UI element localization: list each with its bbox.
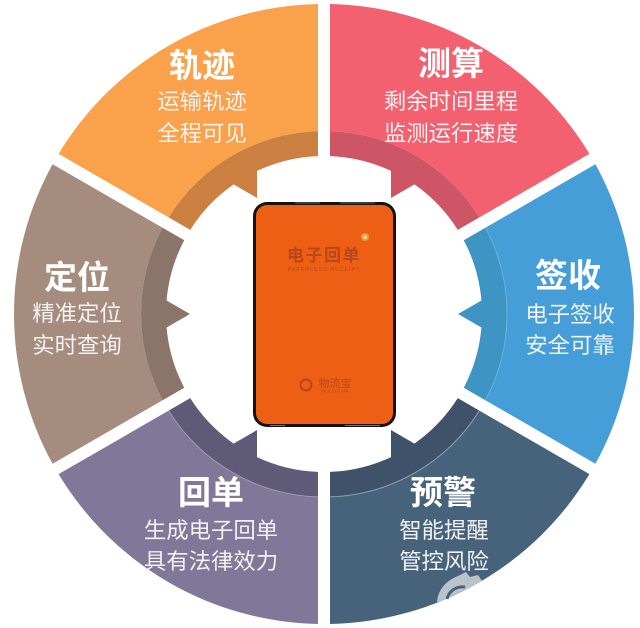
- text: 轨迹 description: 全程可见: [157, 121, 247, 146]
- icon: watermark swirl: [437, 572, 482, 604]
- panel: 定位: [14, 164, 190, 464]
- heading: 轨迹: 轨迹: [169, 47, 235, 84]
- heading: 预警: 预警: [410, 474, 476, 511]
- panel: 预警: [330, 398, 589, 624]
- text: 测算 description: 监测运行速度: [384, 121, 518, 146]
- arrow ring: 定位: [141, 228, 190, 400]
- arrow ring: 回单: [169, 398, 318, 497]
- device subtitle: PAPERLESS RECEIPT: [288, 267, 360, 273]
- panel: 签收: [458, 164, 634, 464]
- arrow ring: 预警: [330, 398, 479, 497]
- arrow ring: 签收: [458, 228, 507, 400]
- device title: 电子回单: [287, 246, 361, 265]
- device: orange receipt terminal: [253, 202, 396, 427]
- device logo: WULIUTUAN: [322, 388, 348, 394]
- text: 回单 description: 生成电子回单: [144, 518, 278, 543]
- text: 签收 description: 安全可靠: [525, 333, 615, 358]
- text: 预警 description: 智能提醒: [399, 518, 489, 543]
- device logo: 物流宝: [318, 376, 352, 390]
- heading: 测算: 测算: [418, 45, 484, 82]
- indicator light: [361, 233, 369, 241]
- panel: 轨迹: [59, 4, 318, 230]
- device logo: [300, 376, 352, 394]
- heading: 回单: 回单: [178, 474, 244, 511]
- text: 回单 description: 具有法律效力: [144, 549, 278, 574]
- panel: 测算: [330, 4, 589, 230]
- text: 预警 description: 管控风险: [399, 549, 489, 574]
- arrow ring: 测算: [330, 131, 479, 230]
- text: 定位 description: 精准定位: [32, 301, 122, 326]
- text: 定位 description: 实时查询: [32, 333, 122, 358]
- heading: 定位: 定位: [44, 259, 110, 296]
- arrow ring: 轨迹: [169, 131, 318, 230]
- panel: 回单: [59, 398, 318, 624]
- text: 签收 description: 电子签收: [525, 302, 615, 327]
- text: 轨迹 description: 运输轨迹: [157, 89, 247, 114]
- text: 测算 description: 剩余时间里程: [384, 89, 518, 114]
- heading: 签收: 签收: [535, 257, 601, 294]
